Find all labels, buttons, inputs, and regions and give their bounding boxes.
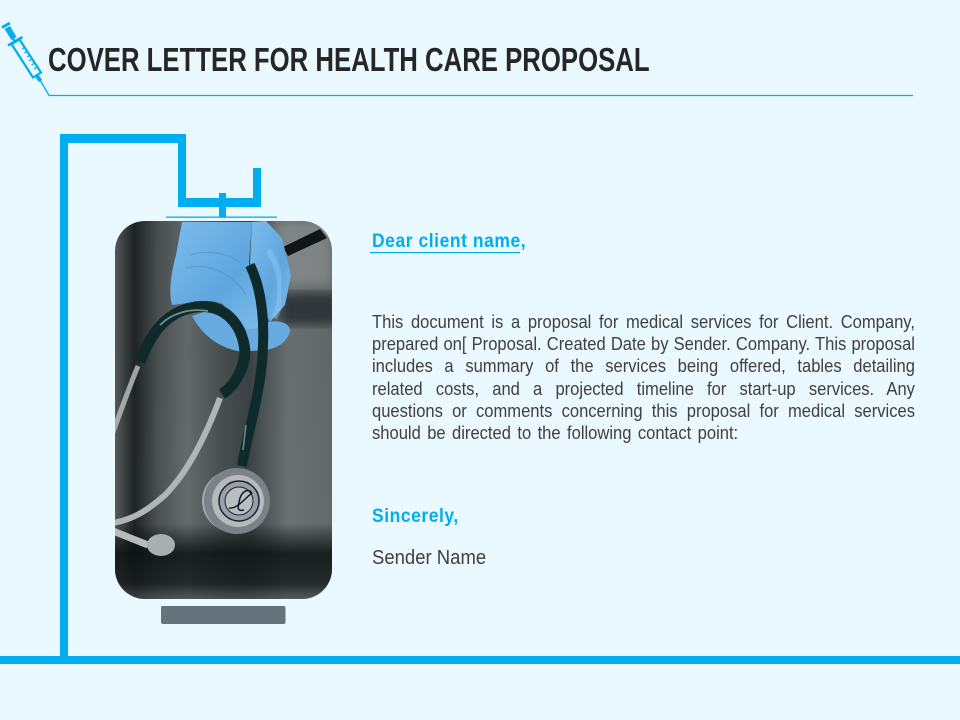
title rule — [40, 80, 913, 96]
body paragraph: questions or comments concerning this proposal for medical services — [372, 401, 915, 421]
body paragraph: includes a summary of the services being offered, tables detailing — [372, 356, 915, 376]
photo: gloved hand holding stethoscope — [113, 221, 340, 599]
greeting underline — [370, 252, 520, 253]
title: COVER LETTER FOR HEALTH CARE PROPOSAL — [48, 41, 650, 78]
greeting: Dear client name, — [372, 231, 526, 252]
body paragraph: prepared on[ Proposal. Created Date by Sender. Company. This proposal — [372, 334, 915, 354]
body paragraph: related costs, and a projected timeline for start-up services. Any — [372, 379, 915, 399]
icon: syringe — [2, 23, 41, 81]
body paragraph: should be directed to the following contact point: — [372, 423, 738, 443]
photo caption bar — [161, 606, 286, 624]
closing: Sincerely, — [372, 506, 459, 527]
body paragraph: This document is a proposal for medical services for Client. Company, — [372, 312, 915, 332]
IV stand pole and hook — [60, 134, 277, 660]
ground line — [0, 656, 960, 664]
body paragraph — [372, 312, 915, 443]
sender name: Sender Name — [372, 547, 486, 569]
